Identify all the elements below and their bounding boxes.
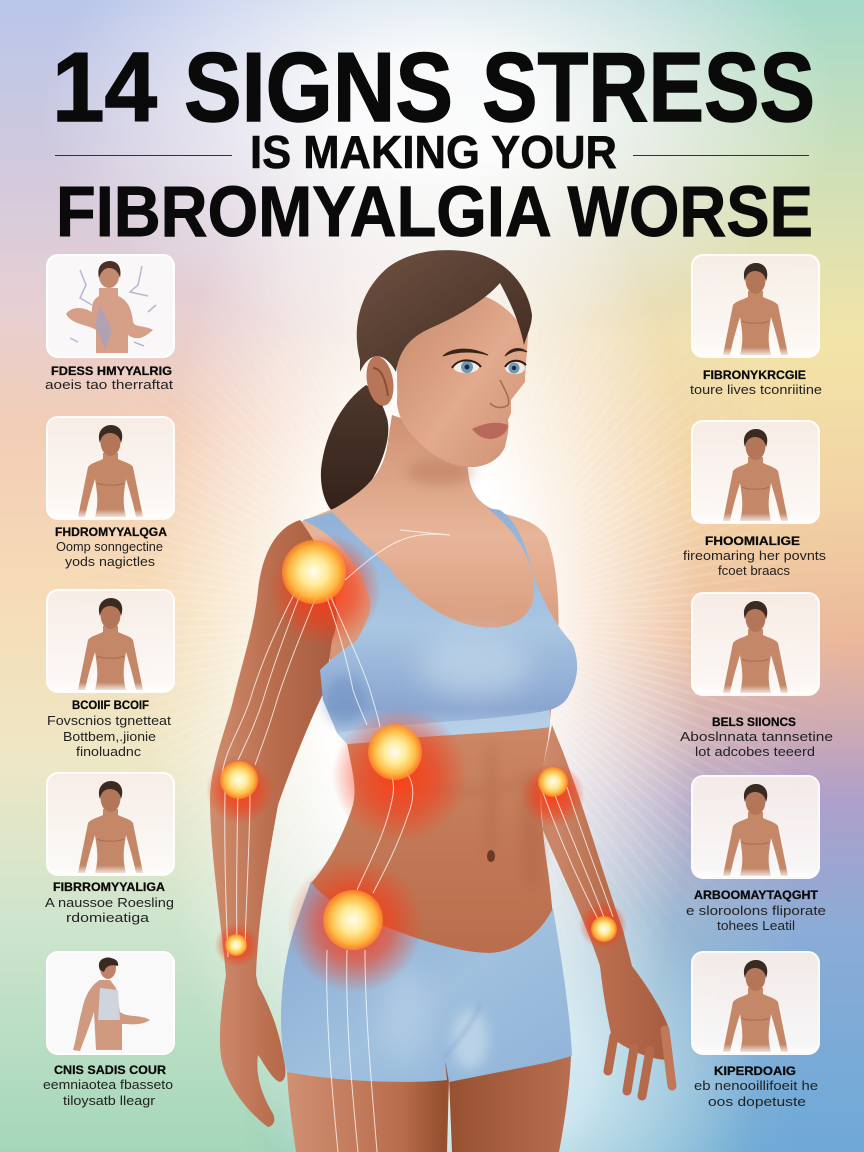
- sign card: right 5: [692, 952, 819, 1054]
- abdomen shading: [430, 745, 544, 890]
- sign text: right 4: ARBOOMAYTAQGHT: [694, 888, 819, 902]
- sign text: left 3: Bottbem,.jionie: [63, 730, 156, 744]
- legs: [287, 1055, 571, 1152]
- sign text: left 1: aoeis tao therraftat: [45, 378, 174, 392]
- sign card: right 1: [692, 255, 819, 357]
- sign text: left 2: yods nagictles: [65, 555, 155, 569]
- main figure: woman with pain points: [206, 250, 672, 1152]
- title line 1: 14: [52, 32, 157, 142]
- neck shadow: [406, 459, 474, 485]
- sign card: left 3: [47, 590, 174, 692]
- sign card: left 5: [47, 952, 174, 1054]
- title: [52, 32, 815, 252]
- pain point: left elbow: [220, 761, 258, 799]
- sign text: right 3: [680, 715, 833, 759]
- pain point: right wrist: [591, 916, 617, 942]
- sign text: left 5: eemniaotea fbasseto: [43, 1078, 173, 1092]
- sign text: right 5: KIPERDOAIG: [714, 1064, 796, 1078]
- title line 1: STRESS: [482, 32, 815, 142]
- sign text: left 4: FIBRROMYYALIGA: [53, 880, 165, 894]
- sign text: right 2: fireomaring her povnts: [683, 549, 826, 563]
- bra top: [303, 508, 577, 744]
- sign text: right 4: tohees Leatil: [717, 919, 795, 933]
- right arm: [540, 725, 672, 1096]
- sign text: right 3: BELS SIIONCS: [712, 715, 796, 729]
- sign text: left 2: Oomp sonngectine: [56, 540, 163, 554]
- sign text: right 3: Aboslnnata tannsetine: [680, 730, 833, 744]
- sign text: right 2: fcoet braacs: [718, 564, 790, 578]
- sign text: left 4: rdomieatiga: [66, 911, 149, 925]
- red pain glows: [206, 534, 627, 993]
- sign text: left 1: FDESS HMYYALRIG: [51, 364, 172, 378]
- title line 1: [52, 32, 815, 142]
- sign card: right 4: [692, 776, 819, 878]
- sign text: right 1: FIBRONYKRCGIE: [703, 368, 806, 382]
- sign text: right 4: e sloroolons fliporate: [686, 904, 826, 918]
- sign text: right 4: [686, 888, 826, 933]
- sign text: right 1: toure lives tconriitine: [690, 383, 822, 397]
- sign card: left 4: [47, 773, 174, 875]
- title line 1: SIGNS: [184, 32, 453, 142]
- sign text: left 5: CNIS SADIS COUR: [54, 1063, 166, 1077]
- navel: [487, 850, 495, 862]
- sign text: right 1: [690, 368, 822, 397]
- sign text: left 2: [55, 525, 167, 569]
- sign card: right 3: [692, 593, 819, 695]
- glowing pain points: [220, 540, 617, 956]
- pain point: right elbow: [538, 767, 568, 797]
- sign text: left 4: A naussoe Roesling: [45, 896, 174, 910]
- sign card: right 2: [692, 421, 819, 523]
- sign text: right 3: lot adcobes teeerd: [695, 745, 815, 759]
- pain point: ribs: [368, 724, 422, 780]
- sign text: left 3: BCOIIF BCOIF: [72, 698, 149, 712]
- title line 3: FIBROMYALGIA WORSE: [56, 173, 813, 252]
- left arm: [210, 520, 337, 1127]
- ponytail: [321, 385, 388, 512]
- sign text: right 5: [694, 1064, 818, 1109]
- sign text: left 3: [47, 698, 172, 759]
- sign text: right 5: eb nenooillifoeit he: [694, 1079, 818, 1093]
- head: [357, 250, 532, 467]
- sign text: left 3: Fovscnios tgnetteat: [47, 714, 172, 728]
- sign text: left 5: tiloysatb lleagr: [63, 1094, 155, 1108]
- pain point: hip: [323, 890, 383, 950]
- sign card: left 1: [47, 255, 174, 357]
- pain point: left wrist: [225, 934, 247, 956]
- nerve lines: [222, 530, 613, 1152]
- sign text: right 5: oos dopetuste: [708, 1095, 806, 1109]
- sign text: left 3: finoluadnc: [76, 745, 141, 759]
- shorts: [281, 881, 572, 1082]
- sign text: right 2: FHOOMIALIGE: [705, 534, 800, 548]
- hair: [357, 250, 532, 372]
- eyes: [453, 361, 479, 373]
- nose: [490, 380, 509, 407]
- sign text: left 4: [45, 880, 174, 925]
- ear: [363, 354, 397, 408]
- left column of signs: [43, 255, 174, 1108]
- right column of signs: [680, 255, 833, 1109]
- sign text: right 2: [683, 534, 826, 578]
- torso: [294, 415, 559, 965]
- eyebrows: [443, 349, 488, 356]
- pain point: shoulder: [282, 540, 346, 604]
- sign text: left 5: [43, 1063, 173, 1108]
- sign text: left 2: FHDROMYYALQGA: [55, 525, 167, 539]
- lips: [472, 423, 508, 439]
- title line 2: IS MAKING YOUR: [250, 126, 617, 178]
- sign card: left 2: [47, 417, 174, 519]
- sign text: left 1: [45, 364, 174, 392]
